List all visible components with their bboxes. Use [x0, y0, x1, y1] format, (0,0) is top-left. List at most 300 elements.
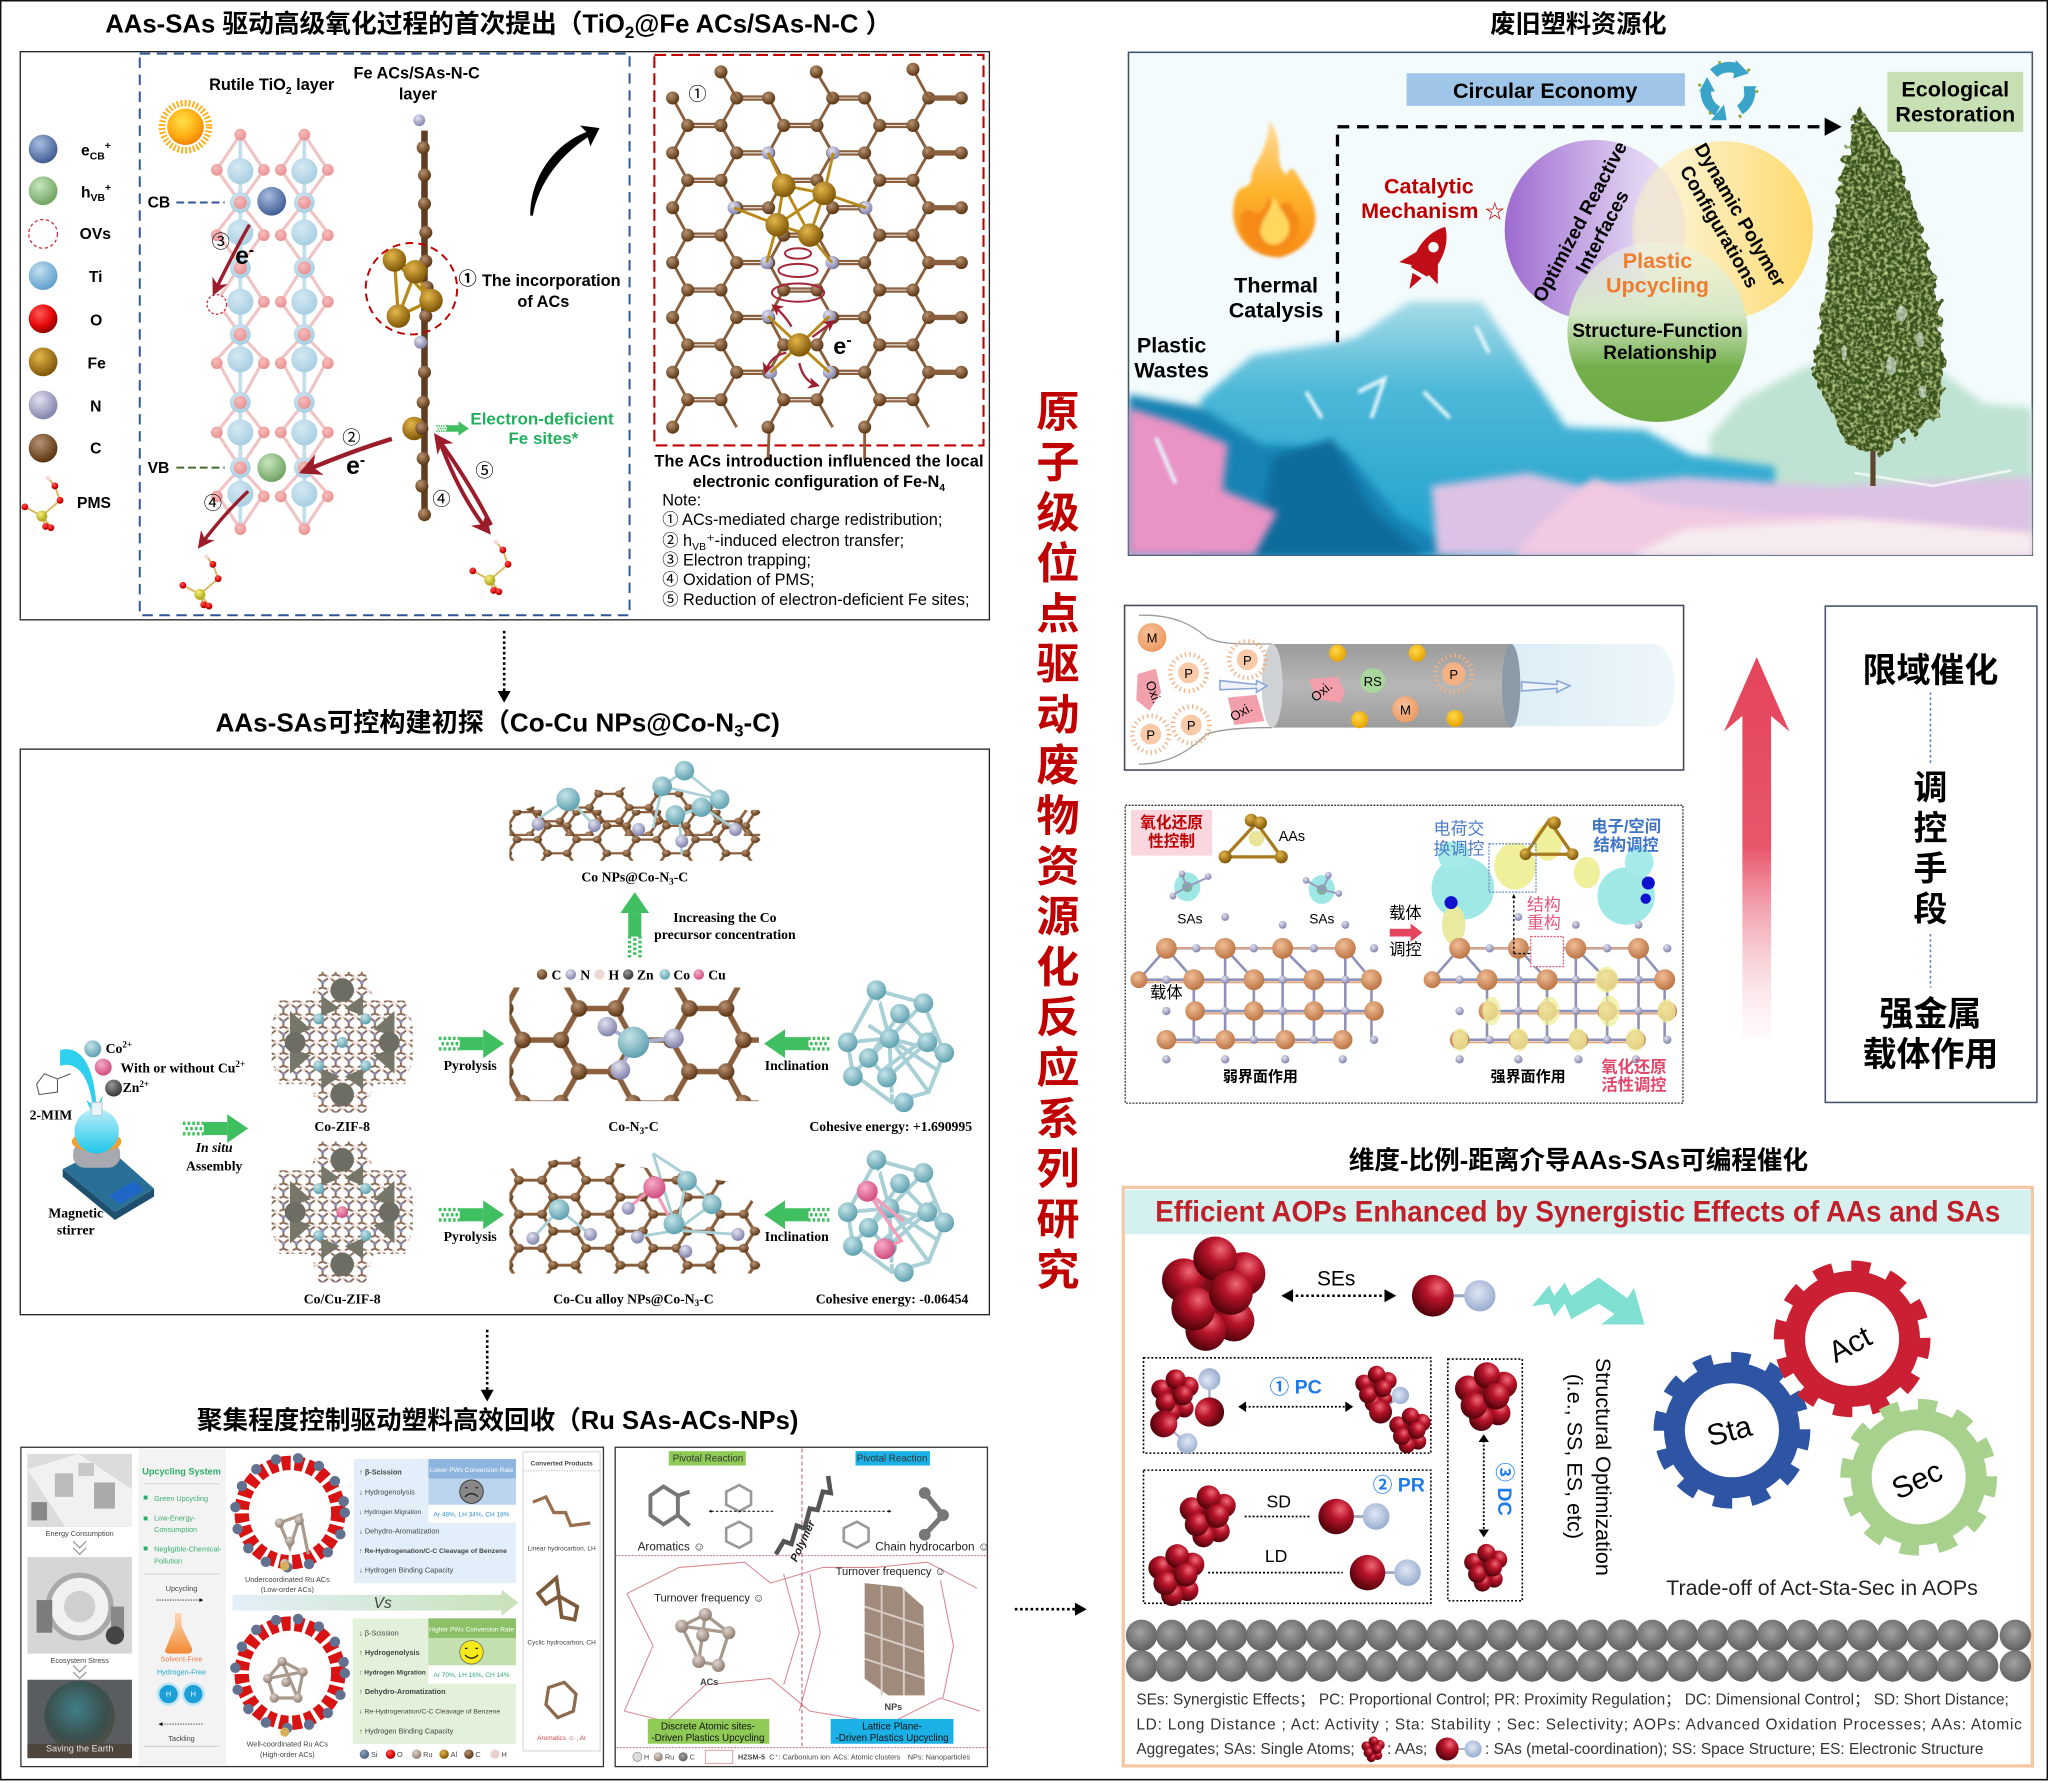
sidebar: upcycling system: Solvent-Free — [161, 1654, 202, 1663]
panel: regulation means: 段 — [1913, 891, 1947, 929]
label and arrow: support regulation: 调控 — [1389, 941, 1422, 959]
arrow: Vs comparison — [232, 1590, 519, 1616]
labels: process steps — [186, 1058, 829, 1244]
central vertical title: 驱 — [1036, 641, 1080, 689]
legend: Ru — [665, 1752, 674, 1761]
title: section 2: AAs-SAs可控构建初探（Co-Cu NPs@Co-N — [215, 707, 734, 737]
precursors: 2+ — [122, 1040, 132, 1050]
panel: strong metal support interaction — [1125, 805, 1683, 1103]
labels: restructure: 结构 — [1527, 895, 1561, 914]
arrow: SEs: SEs — [1317, 1267, 1355, 1290]
panel: confined flow catalysis — [1125, 605, 1684, 770]
sidebar: upcycling system: Consumption — [154, 1525, 197, 1534]
single atoms right — [1303, 872, 1342, 926]
label: Co NPs@Co-N3-C: 3 — [669, 876, 674, 886]
precursors: 2+ — [235, 1059, 245, 1069]
image: saving the earth — [27, 1680, 132, 1758]
label: redox control: 性控制 — [1148, 831, 1195, 850]
venn labels: Optimized Reactive — [1530, 138, 1632, 306]
label: Co NPs@Co-N3-C: Co NPs@Co-N — [581, 870, 669, 885]
legend: zeolite atoms: Si — [371, 1750, 378, 1759]
column: converted products: Cyclic hydrocarbon, CH — [527, 1639, 596, 1646]
NPs cluster: Turnover frequency ☺ — [836, 1566, 946, 1578]
table: low-order performance: Ar 48%, LH 34%, CH 18% — [433, 1511, 510, 1518]
abbreviations legend — [1136, 1692, 2022, 1762]
label: structural optimization: Structural Optimization — [1591, 1358, 1616, 1576]
column: converted products: Linear hydrocarbon, LH — [528, 1545, 596, 1552]
labels: process steps: Pyrolysis — [444, 1229, 497, 1244]
caption: ACs introduction: electronic configuration of Fe-N — [693, 473, 939, 491]
legend: atoms: N — [90, 398, 101, 415]
precursors — [30, 1040, 245, 1123]
table: low-order performance: ↑ Re-Hydrogenation/C-C Cleavage of Benzene — [359, 1548, 507, 1555]
reaction intermediates — [726, 1485, 869, 1548]
FeN4 and Fe cluster: e — [833, 333, 846, 359]
band labels and carriers: CB — [148, 195, 170, 212]
dividers — [615, 1556, 987, 1748]
sidebar: upcycling system: Low-Energy- — [154, 1513, 196, 1522]
labels: charge exchange: 电荷交 — [1433, 820, 1484, 839]
sidebar: upcycling system: Pollution — [154, 1556, 182, 1566]
arrow: chain direction — [823, 1510, 891, 1512]
column: converted products — [522, 1452, 601, 1751]
zeolite ring high-order ACs: (High-order ACs) — [260, 1750, 315, 1759]
legend: atoms: CB — [90, 151, 105, 162]
table: high-order performance — [353, 1618, 516, 1744]
labels: steps: e — [346, 453, 360, 480]
legend: zeolite atoms: Ru — [423, 1750, 433, 1759]
table: low-order performance: ↓ Hydrogenolysis — [359, 1487, 415, 1496]
title: section 1: @Fe ACs/SAs-N-C ） — [634, 11, 891, 39]
table: high-order performance: ↑ Hydrogen Migration — [359, 1670, 426, 1677]
label: support: 载体 — [1150, 984, 1183, 1002]
box: DC — [1448, 1359, 1522, 1601]
label row 2: Co/Cu-ZIF-8 — [304, 1292, 381, 1307]
captions: 弱界面作用 — [1223, 1069, 1298, 1086]
panel: TiO2@Fe ACs/SAs-N-C mechanism — [20, 52, 989, 620]
label row 1: Co-ZIF-8 — [314, 1119, 370, 1134]
label: rutile layer: Rutile TiO — [209, 76, 286, 94]
icon: sun — [162, 103, 209, 150]
venn diagram — [1505, 138, 1813, 422]
labels: electronic/spatial: 结构调控 — [1593, 835, 1659, 854]
panel: regulation means: 强金属 — [1880, 995, 1981, 1033]
central vertical title: 究 — [1036, 1247, 1080, 1295]
arrow: black curved pointer — [530, 125, 600, 216]
central vertical title: 原 — [1036, 389, 1080, 437]
legend — [633, 1750, 971, 1763]
labels: steps: ⑤ — [475, 460, 494, 481]
gear: Sta: Sta — [1703, 1410, 1756, 1453]
labels: electronic/spatial — [1591, 817, 1661, 854]
label: magnetic stirrer: stirrer — [57, 1222, 95, 1237]
sidebar: upcycling system: Green Upcycling — [154, 1494, 208, 1503]
Co-Cu cluster — [838, 1150, 954, 1282]
venn diagram: Interfaces — [1572, 187, 1634, 278]
image: ecosystem stress: Ecosystem Stress — [50, 1656, 109, 1665]
label: redox control: 氧化还原 — [1140, 813, 1203, 832]
labels: steps: ④ — [204, 492, 222, 513]
labels: steps: ② — [342, 427, 360, 448]
legend: elements: Cu — [708, 968, 726, 983]
precursors: 2+ — [139, 1079, 149, 1089]
Fe ACs/SAs-N-C side chain — [366, 114, 457, 521]
label row 2 — [304, 1292, 969, 1308]
label: structural optimization — [1562, 1358, 1616, 1576]
gear: Sec: Sec — [1887, 1455, 1948, 1506]
label row 2: Cohesive energy: -0.06454 — [816, 1292, 969, 1307]
venn diagram: Relationship — [1603, 343, 1717, 364]
labels: process steps: Inclination — [765, 1229, 829, 1244]
gear: Sta — [1661, 1360, 1802, 1501]
Co-ZIF-8 framework — [272, 972, 413, 1113]
molecule: aromatics: Aromatics ☺ — [638, 1540, 705, 1553]
flow arrows — [1220, 681, 1570, 692]
label: redox activity: 氧化还原 — [1601, 1057, 1667, 1076]
icon: flask on magnetic stirrer — [63, 1102, 154, 1220]
note list — [662, 492, 970, 609]
label: rutile layer: 2 — [286, 86, 292, 97]
table: low-order performance — [354, 1459, 516, 1583]
box: PR: SD — [1266, 1491, 1291, 1511]
title: section 3: 聚集程度控制驱动塑料高效回收（Ru SAs-ACs-NPs) — [197, 1406, 798, 1435]
panel: pivotal reactions on Ru ACs vs NPs — [615, 1447, 990, 1767]
label: structural optimization: (i.e., SS, ES, etc) — [1562, 1374, 1587, 1539]
table: low-order performance: ↓ Dehydro-Aromatization — [359, 1526, 439, 1535]
table: high-order performance: Ar 70%, LH 16%, CH 14% — [433, 1672, 510, 1679]
zeolite ring high-order ACs: Well-coordinated Ru ACs — [247, 1739, 328, 1748]
label row 1: Co-N — [608, 1119, 640, 1134]
polymer chain: Polymer — [788, 1518, 818, 1564]
labels: restructure — [1527, 895, 1561, 933]
species outside tube: P — [1184, 666, 1193, 681]
molecule: aromatics — [638, 1486, 705, 1553]
label: plastic wastes: Wastes — [1134, 358, 1209, 383]
label: incorporation of ACs: The incorporation — [482, 272, 621, 290]
support atom rows — [1126, 1620, 2031, 1682]
FeN4 and Fe cluster: - — [846, 332, 852, 349]
label: thermal catalysis — [1229, 273, 1323, 322]
note list: ② h — [662, 532, 692, 550]
label: magnetic stirrer: Magnetic — [48, 1205, 103, 1220]
table: high-order performance: ↓ β-Scission — [359, 1628, 399, 1637]
abbreviations legend: LD: Long Distance ; Act: Activity ; Sta: Stability ; Sec: Selectivity; AOPs: Advanced Oxidation Processes; AAs: Atomic — [1136, 1716, 2022, 1733]
legend: atoms: + — [105, 183, 111, 194]
tags: driven upcycling: -Driven Plastics Upcycling — [836, 1733, 949, 1744]
legend: zeolite atoms: Al — [451, 1750, 457, 1759]
icon: rocket — [1390, 216, 1464, 300]
label: redox activity — [1601, 1057, 1667, 1095]
label row 1 — [314, 1119, 972, 1136]
tags: driven upcycling: Lattice Plane- — [862, 1721, 922, 1732]
title: section 1: 2 — [625, 23, 634, 42]
central vertical title: 资 — [1036, 843, 1080, 891]
zeolite wire background — [624, 1562, 980, 1724]
panel: regulation means — [1825, 606, 2037, 1102]
central vertical title: 源 — [1036, 894, 1080, 942]
table: high-order performance: ↑ Dehydro-Aromatization — [359, 1687, 446, 1696]
species outside tube: P — [1187, 718, 1196, 733]
central vertical title: 列 — [1036, 1146, 1080, 1194]
charge density blobs — [1432, 816, 1655, 944]
Co/Cu-ZIF-8 framework — [272, 1142, 413, 1283]
label and arrow: support regulation — [1389, 904, 1422, 959]
labels: steps: ④ — [432, 489, 451, 510]
single atom — [1412, 1275, 1496, 1317]
legend: zeolite atoms: O — [397, 1750, 403, 1759]
box: PR: LD — [1265, 1546, 1287, 1566]
label: Electron-deficient Fe sites: Fe sites* — [508, 429, 579, 448]
table: high-order performance: Higher PWs Conversion Rate — [429, 1626, 514, 1633]
legend: elements: N — [580, 968, 590, 983]
label: Fe layer: layer — [399, 85, 438, 103]
legend: atoms: e — [81, 142, 90, 160]
arrow: increasing Co — [620, 892, 649, 957]
support lattice left — [1130, 913, 1384, 1064]
venn diagram: Dynamic Polymer — [1690, 140, 1789, 291]
panel: regulation means: 调 — [1913, 769, 1947, 807]
tube — [1262, 644, 1520, 728]
electron arrows — [200, 225, 491, 546]
label: ecological restoration: Ecological — [1901, 77, 2009, 102]
Co NPs lattice — [509, 761, 760, 861]
image: energy consumption — [27, 1454, 132, 1554]
box: PR — [1144, 1470, 1431, 1606]
table: high-order performance: ↓ Re-Hydrogenation/C-C Cleavage of Benzene — [359, 1709, 500, 1716]
legend: atoms: C — [90, 440, 101, 457]
single atoms right: SAs — [1309, 911, 1335, 926]
arrow: SEs — [1281, 1267, 1396, 1302]
sidebar: upcycling system: Upcycling — [166, 1584, 197, 1593]
labels: process steps: In situ — [195, 1140, 233, 1155]
icon: recycle — [1699, 60, 1757, 120]
label row 2: 3 — [695, 1298, 700, 1308]
icon: flame — [1233, 120, 1315, 257]
label: trade-off: Trade-off of Act-Sta-Sec in AOPs — [1666, 1576, 1978, 1600]
legend: C — [690, 1752, 695, 1761]
panel: regulation means: 控 — [1913, 810, 1947, 848]
label: circular economy: Circular Economy — [1453, 78, 1637, 103]
label: incorporation of ACs: ① — [458, 268, 477, 289]
captions — [1223, 1069, 1566, 1086]
table: low-order performance: ↓ Hydrogen Migration — [359, 1509, 421, 1516]
void and boxes — [1489, 844, 1563, 967]
sidebar: upcycling system — [142, 1467, 222, 1746]
captions: 强界面作用 — [1491, 1069, 1566, 1086]
NPs cluster: NPs — [885, 1702, 902, 1712]
legend: atoms: + — [105, 141, 111, 152]
abbreviations legend: SEs: Synergistic Effects； PC: Proportional Control; PR: Proximity Regulation； DC: Dimensional Control； SD: Short Distance; — [1136, 1692, 2009, 1709]
image: energy consumption: Energy Consumption — [46, 1529, 114, 1538]
title: section 1: AAs-SAs 驱动高级氧化过程的首次提出（TiO — [105, 11, 625, 39]
legend: atoms: O — [90, 312, 102, 329]
precursors: 2-MIM — [30, 1107, 72, 1122]
legend: atoms: Ti — [89, 269, 102, 286]
table: high-order performance: ↑ Hydrogen Binding Capacity — [359, 1726, 454, 1735]
legend: elements — [537, 968, 726, 983]
legend: HZSM-5 — [738, 1752, 765, 1761]
legend: ACs: Atomic clusters — [833, 1752, 901, 1761]
species outside tube: Oxi. — [1227, 700, 1255, 724]
label and arrow: support regulation: 载体 — [1389, 904, 1422, 922]
legend: atoms: OVs — [80, 226, 111, 243]
polymer chain — [776, 1476, 831, 1564]
legend: atoms: Fe — [88, 355, 106, 372]
FeN4 and Fe cluster: ① — [688, 84, 707, 105]
tags: driven upcycling: Discrete Atomic sites- — [661, 1721, 755, 1732]
central vertical title — [1036, 389, 1080, 1295]
arrows: reaction direction — [709, 1510, 773, 1512]
label row 2: -C — [699, 1292, 714, 1307]
Co-Cu alloy lattice — [509, 1153, 760, 1274]
legend: H — [644, 1752, 649, 1761]
zeolite ring low-order ACs: (Low-order ACs) — [261, 1585, 314, 1594]
legend: elements: Zn — [637, 968, 654, 983]
venn diagram: Plastic — [1623, 248, 1692, 273]
abbreviations legend: : AAs; — [1387, 1741, 1427, 1758]
legend: elements: C — [551, 968, 561, 983]
tags: driven upcycling: -Driven Plastics Upcycling — [651, 1733, 764, 1744]
sidebar: upcycling system: Tackling — [168, 1734, 195, 1743]
arrow: section 1 to 2 — [498, 631, 511, 703]
title: section 2: -C) — [744, 707, 780, 737]
central vertical title: 废 — [1036, 742, 1080, 790]
species inside tube — [1308, 645, 1472, 728]
central vertical title: 系 — [1036, 1096, 1080, 1144]
label: Electron-deficient Fe sites — [436, 410, 614, 448]
species outside tube: P — [1243, 653, 1252, 668]
venn diagram: Structure-Function — [1572, 321, 1743, 342]
label: catalytic mechanism: Catalytic — [1384, 173, 1474, 198]
ACs cluster: Turnover frequency ☺ — [654, 1592, 764, 1604]
sidebar: upcycling system: H — [166, 1690, 171, 1699]
labels: process steps: Assembly — [186, 1158, 243, 1173]
label: thermal catalysis: Catalysis — [1229, 297, 1323, 322]
tags: driven upcycling — [648, 1719, 953, 1744]
note list: ⁺-induced electron transfer; — [706, 532, 904, 550]
central vertical title: 子 — [1036, 440, 1080, 488]
sidebar: upcycling system: Negligible-Chemical- — [154, 1545, 222, 1554]
label: increasing Co precursor: Increasing the Co — [673, 910, 777, 925]
legend: atoms: VB — [91, 193, 106, 204]
label: catalytic mechanism — [1361, 173, 1505, 223]
FeN4 and Fe cluster — [688, 84, 872, 385]
labels: electronic/spatial: 电子/空间 — [1591, 817, 1661, 836]
single atoms left: SAs — [1177, 911, 1203, 926]
label: circular economy — [1407, 73, 1685, 106]
title: section 2: 3 — [734, 722, 744, 741]
zeolite ring low-order ACs: Undercoordinated Ru ACs — [245, 1575, 330, 1584]
box: blue dashed mechanism region — [140, 54, 630, 615]
support lattice right — [1424, 913, 1677, 1064]
label: incorporation of ACs: of ACs — [517, 293, 569, 311]
legend: zeolite atoms — [360, 1749, 507, 1759]
labels: steps — [204, 231, 494, 513]
column: converted products: Aromatics ☺ , Ar — [537, 1735, 587, 1742]
labels: restructure: 重构 — [1527, 914, 1561, 933]
label: plastic wastes: Plastic — [1137, 333, 1206, 358]
banner: Efficient AOPs Enhanced by Synergistic Effects of AAs and SAs — [1155, 1195, 2000, 1228]
band labels and carriers — [148, 187, 286, 482]
plastic waste landscape — [1128, 302, 2032, 555]
box: DC: ③ DC — [1493, 1462, 1515, 1516]
legend: zeolite atoms: H — [502, 1750, 507, 1759]
label: ecological restoration: Restoration — [1895, 102, 2015, 127]
label row 1: 3 — [640, 1126, 645, 1136]
arrow: to programmable catalysis — [1015, 1603, 1087, 1616]
abbreviations legend: Aggregates; SAs: Single Atoms; — [1136, 1741, 1355, 1758]
venn diagram: Upcycling — [1606, 273, 1709, 298]
arrow: section 2 to 3 — [481, 1330, 494, 1402]
panel: regulation means: 手 — [1913, 850, 1947, 888]
panel: regulation means: 载体作用 — [1863, 1036, 1998, 1074]
label: ecological restoration — [1887, 72, 2023, 132]
species inside tube: P — [1449, 667, 1458, 682]
rutile TiO2 lattice — [211, 129, 334, 535]
panel: synergistic effects of AAs and SAs — [1123, 1187, 2032, 1766]
central vertical title: 反 — [1036, 995, 1080, 1043]
big atomic aggregate — [1162, 1236, 1265, 1351]
gear: Sec — [1848, 1407, 1989, 1548]
note list: Note: — [662, 492, 701, 510]
labels: steps: e — [235, 243, 249, 270]
label: catalytic mechanism: Mechanism — [1361, 198, 1478, 223]
species outside tube: P — [1146, 727, 1155, 742]
label: thermal catalysis: Thermal — [1234, 273, 1318, 298]
gear: Act: Act — [1823, 1320, 1878, 1370]
legend: zeolite atoms: C — [475, 1750, 481, 1759]
label: Electron-deficient Fe sites: Electron-deficient — [470, 410, 614, 429]
note list: ① ACs-mediated charge redistribution; — [662, 511, 942, 529]
species inside tube: RS — [1364, 674, 1382, 689]
labels: steps: - — [360, 452, 365, 469]
species outside tube: M — [1147, 631, 1157, 646]
table: high-order performance: ↑ Hydrogenolysis — [359, 1648, 420, 1657]
mist outlet — [1511, 644, 1674, 726]
label: Fe layer: Fe ACs/SAs-N-C — [354, 64, 480, 82]
venn diagram: Configurations — [1675, 162, 1762, 292]
precursors: Co — [106, 1041, 122, 1056]
central vertical title: 动 — [1036, 692, 1080, 740]
species outside tube — [1132, 623, 1266, 752]
ACs cluster — [654, 1592, 764, 1687]
labels: charge exchange: 换调控 — [1433, 839, 1484, 858]
label row 1: Cohesive energy: +1.690995 — [809, 1119, 972, 1134]
species inside tube: M — [1400, 703, 1411, 718]
sidebar backgrounds — [22, 1449, 226, 1766]
icon: tree — [1814, 106, 1945, 486]
labels: charge exchange — [1433, 820, 1484, 858]
tags: pivotal reaction: Pivotal Reaction — [857, 1454, 927, 1465]
zeolite ring low-order ACs — [235, 1458, 345, 1594]
panel: Co-Cu synthesis route — [20, 749, 989, 1315]
arrows: pyrolysis and inclination — [183, 1029, 829, 1229]
species inside tube: Oxi. — [1308, 678, 1335, 705]
caption: ACs introduction: The ACs introduction influenced the local — [654, 452, 984, 470]
label: catalytic mechanism: ☆ — [1485, 201, 1505, 223]
label: redox activity: 活性调控 — [1601, 1076, 1667, 1095]
AAs triangle: AAs — [1279, 829, 1305, 845]
note list: ④ Oxidation of PMS; — [662, 571, 815, 589]
box: PR: ② PR — [1373, 1475, 1425, 1497]
legend: elements: H — [609, 968, 620, 983]
image: saving the earth: Saving the Earth — [46, 1744, 113, 1754]
sidebar: upcycling system: Hydrogen-Free — [157, 1668, 206, 1677]
tags: pivotal reaction — [669, 1451, 930, 1466]
box: PC — [1144, 1358, 1431, 1460]
label: increasing Co precursor — [654, 910, 796, 942]
label: magnetic stirrer — [48, 1205, 103, 1237]
